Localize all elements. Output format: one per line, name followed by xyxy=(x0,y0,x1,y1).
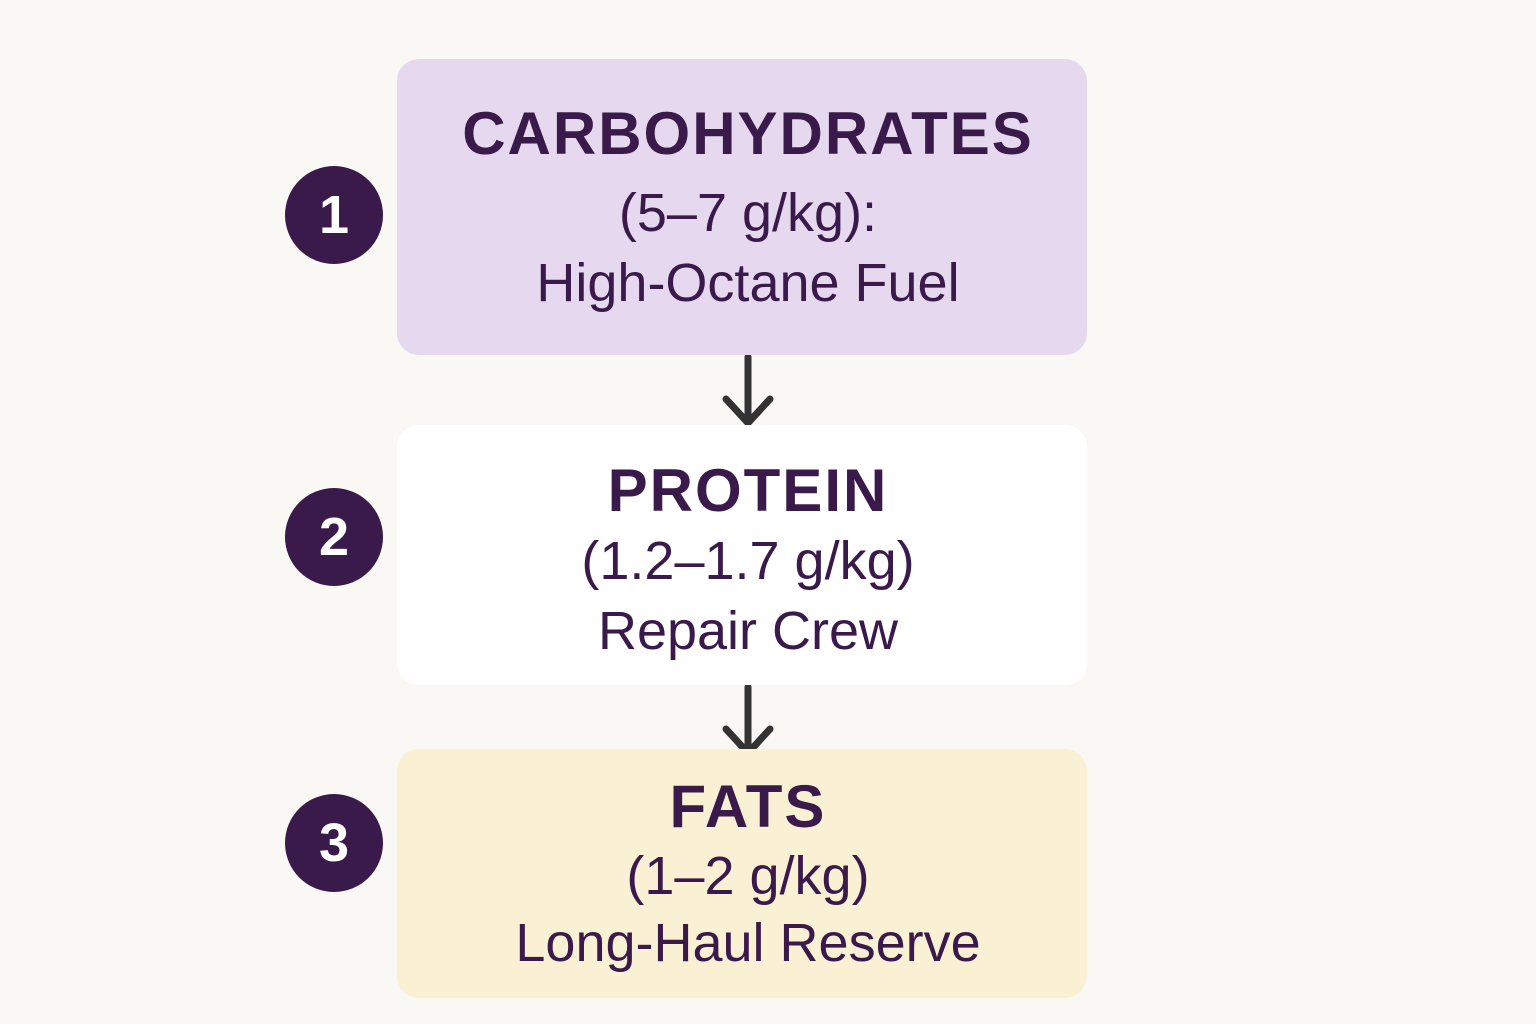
icon: number 1: 1 xyxy=(319,185,349,245)
panel: fats xyxy=(397,749,1087,998)
arrow: 2 to 3 xyxy=(722,685,774,749)
text: carbohydrate role: High-Octane Fuel xyxy=(536,253,960,313)
icon: number 3 xyxy=(285,794,383,892)
panel: protein xyxy=(397,425,1087,685)
text: carbohydrate amount: (5–7 g/kg): xyxy=(619,183,877,243)
heading: protein: PROTEIN xyxy=(608,457,888,524)
icon: number 2: 2 xyxy=(319,507,349,567)
text: protein role: Repair Crew xyxy=(598,601,898,661)
text: fats role: Long-Haul Reserve xyxy=(515,913,981,973)
text: protein amount: (1.2–1.7 g/kg) xyxy=(581,531,915,591)
icon: number 3: 3 xyxy=(319,813,349,873)
icon: number 2 xyxy=(285,488,383,586)
heading: carbohydrates: CARBOHYDRATES xyxy=(462,100,1034,167)
text: fats amount: (1–2 g/kg) xyxy=(626,846,870,906)
arrow: 1 to 2 xyxy=(722,355,774,425)
heading: fats: FATS xyxy=(670,773,826,840)
icon: number 1 xyxy=(285,166,383,264)
panel: carbohydrates xyxy=(397,59,1087,355)
